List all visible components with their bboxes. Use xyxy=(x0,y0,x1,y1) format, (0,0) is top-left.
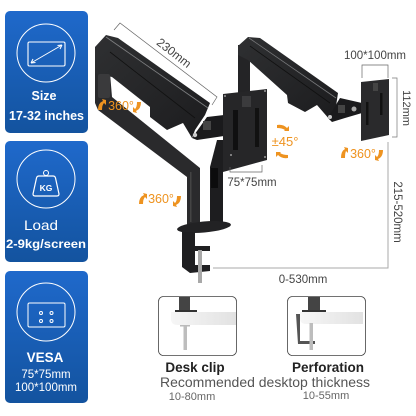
icon: screen size xyxy=(17,24,75,82)
panel: perforation xyxy=(288,296,366,356)
clamp xyxy=(182,232,210,273)
label: 75*75mm: 75*75mm xyxy=(227,177,277,189)
vesa values: 100*100mm xyxy=(15,382,77,394)
panel: size xyxy=(5,11,88,133)
callout: base rotation: 360° xyxy=(148,192,174,206)
dimension lines xyxy=(114,23,397,268)
callout: tilt 45 xyxy=(272,125,298,158)
left upper arm xyxy=(95,35,210,138)
panel: vesa xyxy=(5,271,88,403)
load value: 2-9kg/screen xyxy=(6,237,86,251)
column rear xyxy=(210,140,223,224)
perforation title: Perforation xyxy=(292,360,364,375)
label: 100*100mm: 100*100mm xyxy=(344,50,406,62)
right arm riser xyxy=(238,45,250,93)
right vesa plate xyxy=(361,79,389,141)
perforation range: 10-55mm xyxy=(303,390,349,402)
callout: upper arm rotation: 360° xyxy=(108,99,134,113)
icon: vesa holes xyxy=(17,283,75,341)
left lower arm and column xyxy=(95,73,200,228)
load heading: Load xyxy=(24,217,58,233)
vesa values: 75*75mm xyxy=(21,369,71,381)
panel: desk clip xyxy=(158,296,236,356)
left arm hinge xyxy=(192,115,224,140)
callout: base rotation xyxy=(139,192,181,207)
callout: tilt 45: ±45° xyxy=(272,134,298,149)
right upper arm xyxy=(238,37,338,120)
desk clip range: 10-80mm xyxy=(169,391,215,403)
left vesa plate xyxy=(223,89,267,172)
label: 215-520mm: 215-520mm xyxy=(391,181,403,243)
desk clip title: Desk clip xyxy=(165,360,225,375)
right arm hinge xyxy=(328,98,362,122)
size value: 17-32 inches xyxy=(9,109,84,123)
size heading: Size xyxy=(31,89,57,103)
label: 0-530mm: 0-530mm xyxy=(279,274,327,286)
perforation diagram xyxy=(296,297,363,350)
left elbow xyxy=(98,74,110,98)
desk clip diagram xyxy=(171,297,236,350)
callout: right plate rotation: 360° xyxy=(350,147,376,161)
label: 112mm: 112mm xyxy=(400,90,412,126)
vesa values xyxy=(15,369,77,394)
label: 230mm: 230mm xyxy=(154,35,194,71)
callout: upper arm rotation xyxy=(98,99,141,113)
monitor arm xyxy=(95,35,389,283)
callout: right plate rotation xyxy=(341,147,383,161)
vesa heading: VESA xyxy=(27,350,64,365)
icon: weight: KG xyxy=(40,183,53,193)
base xyxy=(177,219,231,235)
desktop thickness caption: Recommended desktop thickness xyxy=(160,374,370,390)
panel: load xyxy=(5,141,88,262)
